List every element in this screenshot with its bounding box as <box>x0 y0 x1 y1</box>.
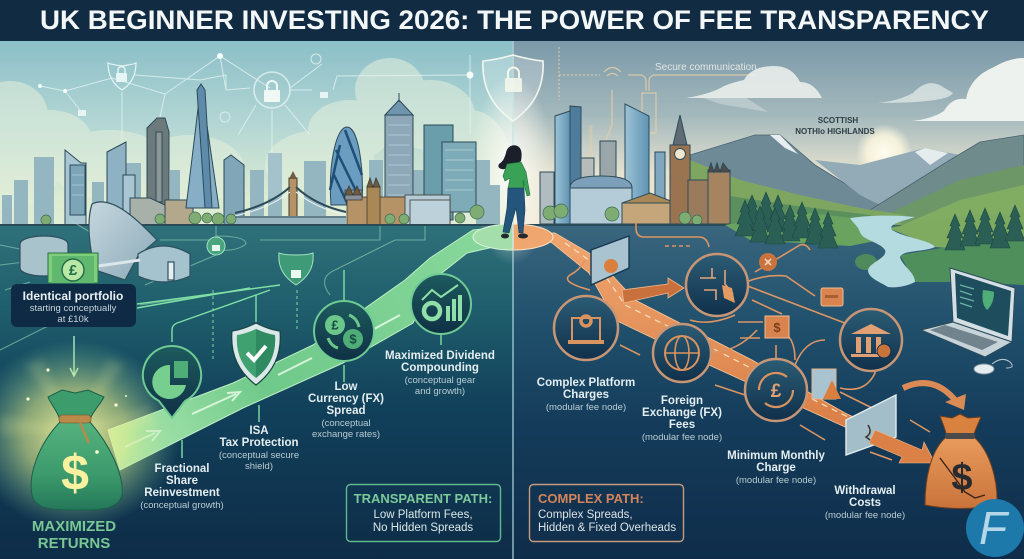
ground: transparent side <box>0 225 512 559</box>
ground circuit lines: left <box>0 220 425 350</box>
step: minimum monthly charge: Minimum Monthly <box>727 450 825 462</box>
light rays behind bag <box>0 358 155 435</box>
London background skyline <box>2 153 500 225</box>
step: maximized dividend compounding <box>385 274 495 397</box>
large curved arrow to loss bag <box>903 383 955 400</box>
step: foreign exchange fees: Exchange (FX) <box>642 407 722 419</box>
step: complex platform charges: Charges <box>563 389 609 401</box>
horizon line <box>0 224 850 226</box>
walkway platform <box>473 224 553 250</box>
Tower Bridge <box>235 171 346 225</box>
logo badge <box>966 499 1024 557</box>
transparent green path <box>108 226 512 470</box>
icon: bank node <box>840 309 902 371</box>
network lock icons: left sky <box>38 53 474 116</box>
London window grid lines <box>72 125 473 195</box>
icon: cracked orange money bag <box>925 414 997 508</box>
orange path <box>530 232 875 427</box>
label: maximized returns: MAXIMIZED <box>32 518 116 535</box>
step: low FX spread: Low <box>334 381 358 393</box>
step: low FX spread: Spread <box>326 405 366 417</box>
step: foreign exchange fees: (modular fee node) <box>642 432 722 443</box>
riverbank hills <box>725 212 1024 285</box>
step: ISA tax protection: ISA <box>249 425 269 437</box>
step: ISA tax protection: (conceptual secure <box>219 450 299 461</box>
step: maximized dividend compounding: Compounding <box>401 362 479 374</box>
label: secure communication: Secure communication <box>655 62 757 73</box>
glow behind green money bag <box>0 340 180 530</box>
step: ISA tax protection: shield) <box>245 461 273 472</box>
label: Scottish Highlands: SCOTTISH <box>818 116 858 125</box>
icon: warning document <box>812 369 841 399</box>
callout: transparent path: No Hidden Spreads <box>373 522 473 534</box>
callout: transparent path <box>346 484 500 542</box>
step: maximized dividend compounding: and growth) <box>415 386 465 397</box>
arrowhead to loss bag <box>945 394 966 410</box>
trees along London skyline <box>41 205 484 225</box>
icon: gear and growth <box>411 274 471 334</box>
network lines: right sky <box>559 47 755 170</box>
green connector arrows <box>70 270 441 458</box>
icon: small fee card <box>765 316 789 338</box>
step: low FX spread: (conceptual <box>321 418 371 429</box>
divider line <box>512 41 514 559</box>
step: fractional share reinvestment <box>140 346 224 511</box>
step: ISA tax protection: Tax Protection <box>219 437 299 449</box>
icon: small wallet <box>821 288 843 306</box>
icon: currency exchange: $ <box>349 332 357 346</box>
secure network lines: left sky <box>40 54 470 170</box>
step: minimum monthly charge <box>727 359 825 486</box>
futuristic dome buildings <box>20 202 190 282</box>
step: minimum monthly charge: Charge <box>756 462 796 474</box>
icon: green money bag <box>31 390 122 510</box>
icon: green money bag: $ <box>61 445 89 501</box>
step: low FX spread: exchange rates) <box>312 429 380 440</box>
orange arrow through wall <box>869 430 935 463</box>
sparkles around green bag <box>26 368 127 454</box>
step: withdrawal costs: Costs <box>849 497 881 509</box>
icon: pie chart pin <box>143 346 201 418</box>
step: foreign exchange fees: Foreign <box>661 395 703 407</box>
pound banknote: £ <box>69 262 78 279</box>
title banner: UK BEGINNER INVESTING 2026: THE POWER OF FEE TRANSPARENCY <box>40 5 989 35</box>
step: complex platform charges <box>537 296 635 413</box>
icon: fee x marker: ✕ <box>763 257 773 269</box>
callout: identical portfolio: at £10k <box>57 314 89 325</box>
icon: central circuit node <box>686 254 748 316</box>
central security shield <box>483 55 543 121</box>
callout: transparent path: TRANSPARENT PATH: <box>354 491 492 506</box>
pine forests <box>735 192 1024 250</box>
icon: check shield <box>232 323 280 385</box>
river <box>850 216 935 287</box>
step: withdrawal costs: Withdrawal <box>834 485 896 497</box>
ground shield lock icon <box>279 253 313 285</box>
step: foreign exchange fees <box>642 324 722 443</box>
Gherkin <box>330 127 362 205</box>
label: maximized returns: RETURNS <box>38 535 110 552</box>
sun over highlands <box>856 124 912 180</box>
broken panel: top <box>591 236 629 285</box>
callout: identical portfolio: starting conceptually <box>30 303 117 314</box>
clouds: right sky <box>686 58 1024 121</box>
pound banknote <box>48 253 98 283</box>
clouds behind London skyline <box>0 58 510 210</box>
step: withdrawal costs: (modular fee node) <box>825 510 905 521</box>
sky: transparent side <box>0 41 512 225</box>
icon: cracked orange money bag: $ <box>951 457 973 499</box>
woman walking figure <box>498 145 530 238</box>
ground lock badge icon <box>207 237 225 255</box>
callout: identical portfolio: Identical portfolio <box>23 289 123 303</box>
icon: small fee card: $ <box>773 320 781 335</box>
right skyline: glass towers <box>540 104 730 224</box>
step: complex platform charges: (modular fee node) <box>546 402 626 413</box>
broken wall panel <box>846 395 896 455</box>
step: fractional share reinvestment: Reinvestment <box>144 487 220 499</box>
step: complex platform charges: Complex Platform <box>537 377 635 389</box>
London skyline towers <box>65 84 476 225</box>
icon: globe node <box>653 324 711 382</box>
step: low FX spread: Currency (FX) <box>308 393 384 405</box>
central light glow <box>470 75 554 265</box>
title banner <box>0 0 1024 41</box>
right skyline trees <box>543 204 702 225</box>
callout: identical portfolio <box>11 284 136 327</box>
step: maximized dividend compounding: Maximized Dividend <box>385 350 495 362</box>
icon: fee x marker <box>759 253 777 271</box>
icon: laptop gear node <box>554 296 618 360</box>
step: low FX spread <box>308 301 384 440</box>
sky: complex side <box>512 41 1024 225</box>
step: fractional share reinvestment: Share <box>166 475 198 487</box>
step: fractional share reinvestment: Fractional <box>155 463 209 475</box>
label: maximized returns <box>32 518 116 552</box>
label: Scottish Highlands: NOTHIo HIGHLANDS <box>795 127 875 136</box>
icon: currency exchange <box>314 301 374 361</box>
callout: complex path: Hidden & Fixed Overheads <box>538 522 676 534</box>
icon: laptop <box>921 268 1015 374</box>
icon: recurring pound node: £ <box>771 381 782 402</box>
step: ISA tax protection <box>219 323 299 472</box>
step: foreign exchange fees: Fees <box>669 419 695 431</box>
callout: complex path <box>530 484 684 542</box>
logo badge: F <box>979 502 1010 554</box>
step: maximized dividend compounding: (conceptual gear <box>405 375 475 386</box>
icon: currency exchange: £ <box>331 318 339 332</box>
callout: transparent path: Low Platform Fees, <box>373 509 473 521</box>
callout: complex path: Complex Spreads, <box>538 509 633 521</box>
callout: complex path: COMPLEX PATH: <box>538 491 644 506</box>
ground: complex side <box>512 225 1024 559</box>
tangled orange arrows <box>568 222 930 460</box>
step: minimum monthly charge: (modular fee node) <box>736 475 816 486</box>
step: withdrawal costs <box>825 485 905 521</box>
Parliament buildings <box>345 178 450 225</box>
label: Scottish Highlands <box>795 116 875 136</box>
step: fractional share reinvestment: (conceptual growth) <box>140 500 224 511</box>
mountains: Scottish Highlands <box>690 135 1024 240</box>
